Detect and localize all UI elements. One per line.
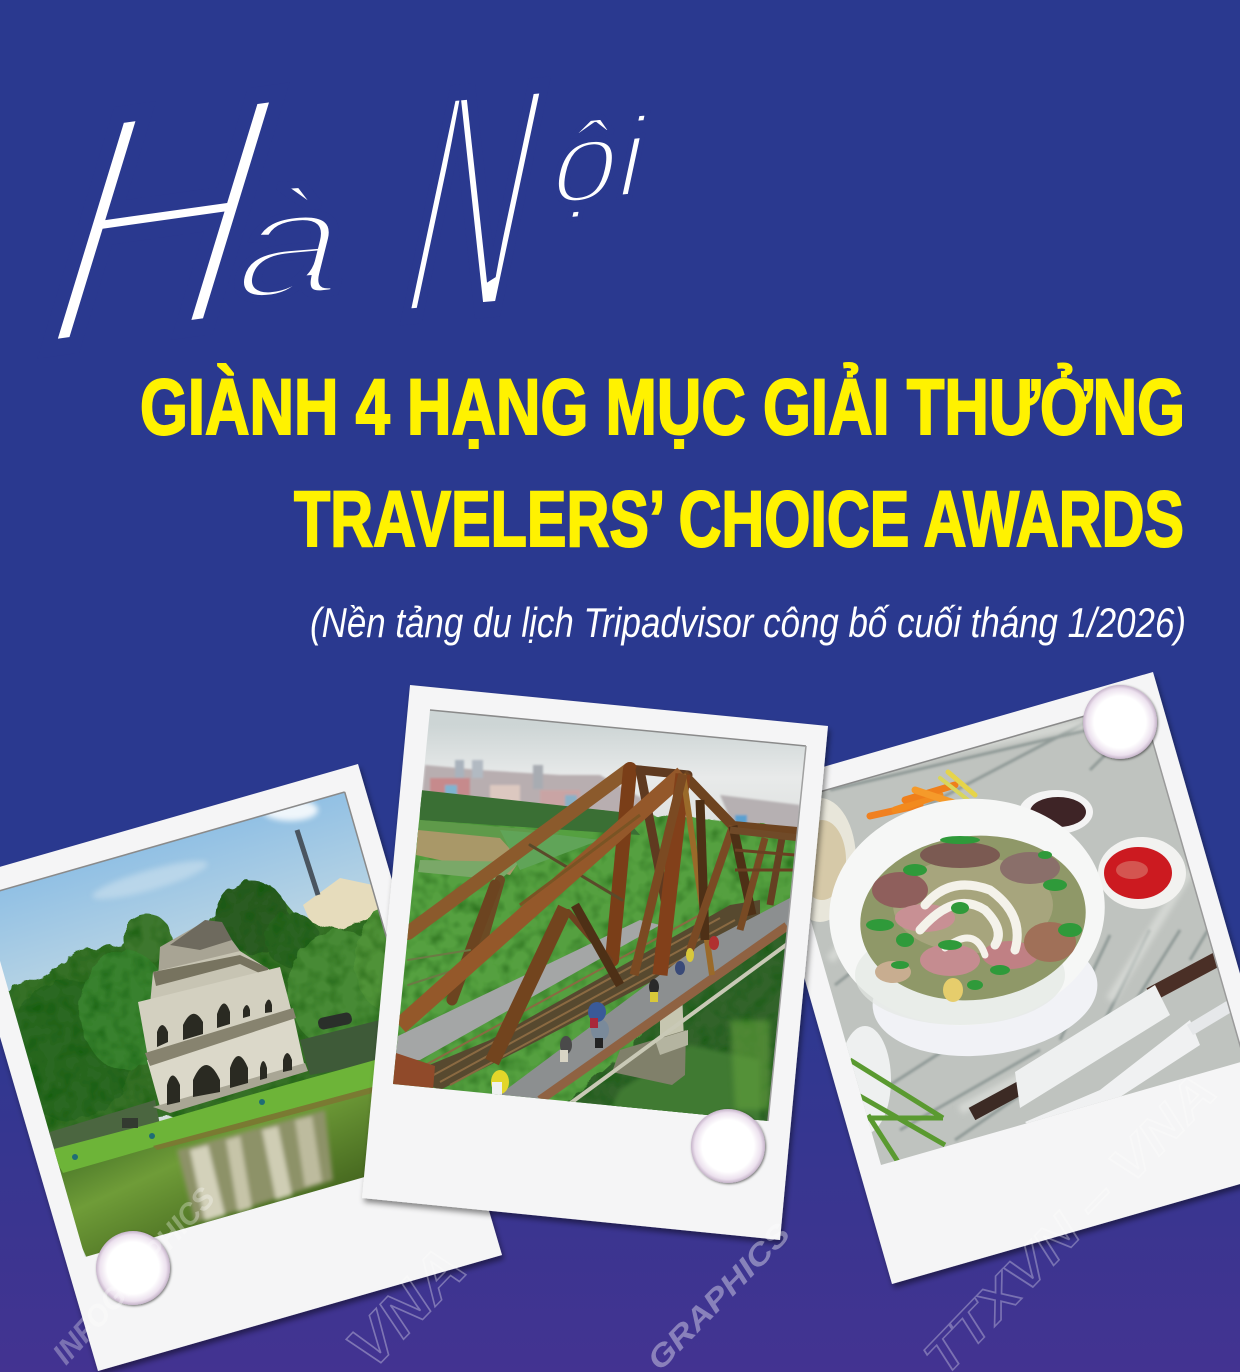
polaroid: Turtle Tower, Hoan Kiem Lake (0, 764, 502, 1371)
watermark: INFOGRAPHICS left: INFOGRAPHICS (47, 1181, 222, 1371)
wood planks (810, 720, 1230, 1140)
frame (750, 672, 1240, 1284)
script title: Hà Nội: H (2, 16, 325, 424)
pin (691, 1109, 765, 1183)
tracks (405, 900, 760, 1090)
brown sauce dish (1019, 790, 1093, 834)
script title: Hà Nội: ội (541, 92, 660, 230)
girder end block (393, 1053, 435, 1088)
pier (660, 1005, 684, 1037)
scallions in soup (866, 836, 1082, 990)
fields and greenery (393, 797, 796, 1121)
motorbikes (491, 936, 719, 1096)
polaroid: Long Bien Bridge (362, 685, 828, 1240)
frame (0, 764, 502, 1371)
script title: Hà Nội: à (218, 153, 369, 333)
polaroid: pho bowl (804, 672, 1240, 1290)
script title: Hà Nội (2, 13, 660, 424)
near road (495, 898, 790, 1100)
pin (96, 1231, 170, 1305)
pin (1083, 685, 1157, 759)
lower right foliage (567, 932, 786, 1121)
photo: Turtle Tower (0, 793, 386, 1257)
onion rings (920, 885, 1017, 955)
carrot (870, 772, 975, 816)
beef (872, 842, 1076, 983)
lake (54, 1087, 372, 1257)
photo: pho (810, 717, 1240, 1165)
tower (138, 920, 308, 1113)
frame (362, 685, 828, 1240)
far truss (408, 769, 688, 1000)
reflection (177, 1110, 333, 1222)
city skyline (422, 759, 800, 827)
near truss (400, 774, 800, 1062)
saucer (872, 962, 1098, 1056)
script title: Hà Nội: N (377, 13, 574, 387)
chopsticks and paper sleeves (972, 1088, 1020, 1114)
scallion stalks (846, 1026, 891, 1132)
far road (395, 920, 660, 1060)
red sauce dish (1098, 837, 1186, 909)
bowl (829, 798, 1105, 998)
photo: Long Bien Bridge (380, 705, 820, 1130)
bean sprout plate (810, 798, 856, 922)
